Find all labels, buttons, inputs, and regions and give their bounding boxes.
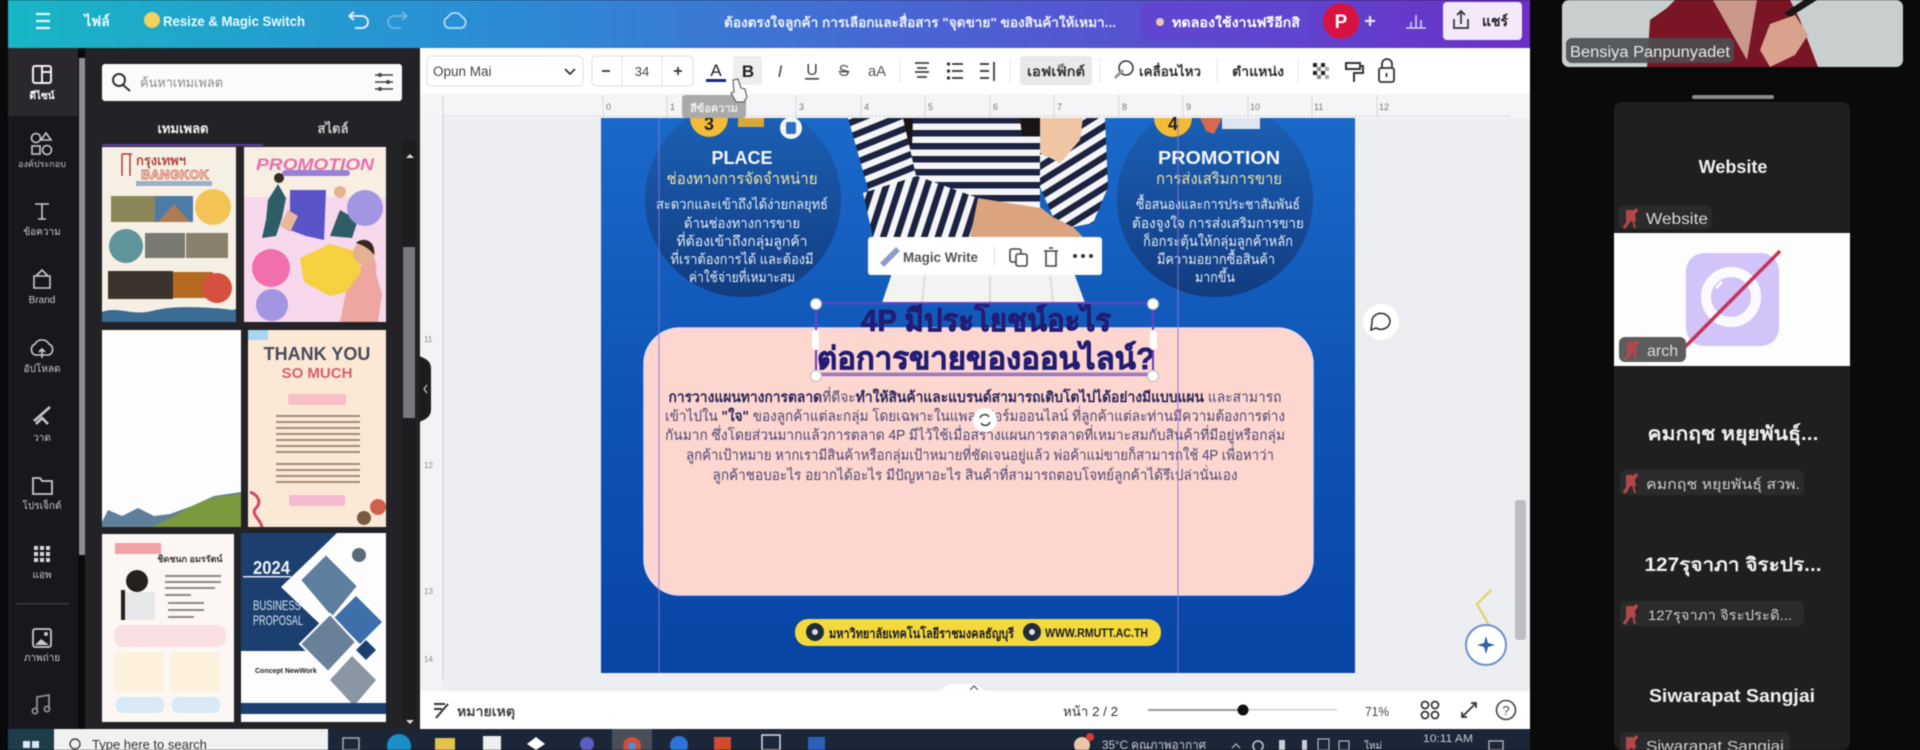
participant: Website: Website <box>1699 157 1767 177</box>
nav: design <box>29 66 55 102</box>
underline button: U <box>806 62 818 79</box>
nav: photos: ภาพถ่าย <box>24 653 60 664</box>
footer pill <box>795 619 1161 646</box>
left nav sidebar <box>8 48 85 730</box>
taskbar app icons <box>343 729 825 750</box>
panel collapse handle <box>419 356 431 422</box>
nav: design: ดีไซน์ <box>29 89 55 102</box>
participant: 127รุจาภา: 127รุจาภา จิระปร... <box>1644 555 1822 577</box>
place body: สะดวกและเข้าถึงได้ง่ายกลยุทธ์ <box>656 196 828 213</box>
icon: number 3 badge: 3 <box>704 114 714 134</box>
icon: fullscreen <box>1462 703 1476 717</box>
icon: windows start <box>23 741 39 748</box>
search box: ค้นหาเทมเพลต <box>140 75 223 90</box>
nav: text <box>23 204 61 238</box>
body paragraph: กันมาก ซึ่งโดยส่วนมากแล้วการตลาด 4P มีไว้ใช้เมื่อสร้างแผนการตลาดที่เหมาะสมกับสินค้าที่มีอยู่หรือกลุ่ม <box>665 425 1285 444</box>
place heading: PLACE <box>711 148 773 168</box>
template panel <box>85 48 420 730</box>
pink content panel <box>644 328 1313 595</box>
share button: แชร์ <box>1482 13 1509 29</box>
participant: คมกฤช: คมกฤช หยุยพันธุ์ สวพ. <box>1646 476 1800 493</box>
horizontal ruler: 3 <box>799 102 804 112</box>
nav: apps <box>32 546 52 581</box>
template: Thank you <box>248 330 386 527</box>
presenter name tag <box>1566 38 1734 63</box>
footer pill: มหาวิทยาลัยเทคโนโลยีราชมงคลธัญบุรี <box>829 625 1014 642</box>
vertical ruler: 13 <box>424 587 433 596</box>
icon: tag card <box>1222 118 1260 129</box>
search field <box>54 729 328 750</box>
icon: megaphone <box>1200 118 1222 134</box>
tabs: สไตล์ <box>318 120 348 136</box>
font selector: Opun Mai <box>433 64 492 79</box>
body paragraph <box>665 387 1285 484</box>
participant: arch: arch <box>1647 343 1678 360</box>
icon: notifications <box>1489 741 1503 750</box>
try pro button <box>1141 3 1309 40</box>
promotion body <box>1132 194 1304 285</box>
tooltip: text colour: สีข้อความ <box>690 102 738 115</box>
vertical ruler <box>420 96 443 691</box>
template: blank with hills <box>102 330 241 527</box>
text colour button <box>706 61 726 82</box>
template: Thank you: SO MUCH <box>282 365 352 382</box>
model photo: woman in striped shirt <box>848 118 1108 303</box>
editing toolbar <box>420 48 1530 118</box>
bold button <box>733 56 762 85</box>
windows taskbar <box>8 729 1530 750</box>
icon: number 3 badge <box>690 114 728 137</box>
design page <box>601 114 1355 673</box>
horizontal ruler: 7 <box>1057 102 1062 112</box>
body paragraph: การวางแผนทางการตลาดที่ดีจะทำให้สินค้าและแบรนด์สามารถเติบโตไปได้อย่างมีแบบแผน และสามารถ <box>668 387 1282 406</box>
page counter: หน้า 2 / 2 <box>1063 704 1118 719</box>
promotion body: มากขึ้น <box>1195 267 1235 285</box>
nav: photos <box>24 629 60 664</box>
participant: Siwarapat: Siwarapat Sangjai <box>1649 686 1815 706</box>
vertical ruler: 11 <box>424 335 433 344</box>
nav: music <box>32 695 50 714</box>
effects button <box>1020 56 1092 85</box>
icon: analytics <box>1406 15 1426 28</box>
horizontal ruler: 5 <box>928 102 933 112</box>
promotion body: ก็อกระตุ้นให้กลุ่มลูกค้าหลัก <box>1143 232 1293 250</box>
body paragraph: เข้าไปใน "ใจ" ของลูกค้าแต่ละกลุ่ม โดยเฉพาะในแพลตฟอร์มออนไลน์ ที่ลูกค้าแต่ละท่านมีความต้องการต่าง <box>665 406 1285 425</box>
weather widget <box>1074 733 1206 750</box>
template: business proposal: 2024 <box>253 558 290 578</box>
participant: Website <box>1618 157 1767 229</box>
font size stepper <box>592 56 693 86</box>
search box <box>102 64 402 101</box>
horizontal ruler: 0 <box>606 102 611 112</box>
panel: promotion <box>1117 114 1313 297</box>
icon: transparency <box>1313 63 1329 79</box>
bottom status bar <box>420 684 1530 729</box>
clock: 10:11 AM <box>1423 733 1473 745</box>
floating toolbar: Magic Write <box>868 237 1102 275</box>
canvas workspace <box>419 94 1530 691</box>
horizontal ruler: 9 <box>1186 102 1191 112</box>
floating toolbar: Magic Write: Magic Write <box>903 249 978 265</box>
promotion body: มีความอยากซื้อสินค้า <box>1157 249 1275 267</box>
promotion subheading: การส่งเสริมการขาย <box>1156 171 1282 188</box>
notes <box>434 704 515 720</box>
align button <box>915 63 929 77</box>
heading: 4P benefits <box>817 302 1155 376</box>
participant: คมกฤช <box>1620 423 1818 495</box>
nav: apps: แอพ <box>32 570 52 581</box>
panel: place <box>645 114 841 297</box>
nav: uploads <box>24 340 60 375</box>
icon: plus <box>1365 16 1375 26</box>
panel drag handle <box>1692 95 1774 99</box>
horizontal ruler: 12 <box>1379 102 1389 112</box>
template: Bangkok <box>102 147 236 322</box>
font selector <box>427 56 583 86</box>
canvas scrollbar <box>1515 500 1526 640</box>
icon: number 4 badge: 4 <box>1168 114 1178 134</box>
horizontal ruler: 8 <box>1122 102 1127 112</box>
place body: ด้านช่องทางการขาย <box>684 215 800 231</box>
template: Bangkok: BANGKOK <box>141 167 210 182</box>
zoom percent: 71% <box>1365 704 1389 719</box>
avatar P: P <box>1335 12 1348 33</box>
promotion body: ต้องจูงใจ การส่งเสริมการขาย <box>1132 215 1304 232</box>
icon: paint roller <box>1346 63 1363 82</box>
icon: hamburger menu <box>36 14 50 28</box>
footer pill: WWW.RMUTT.AC.TH <box>1045 626 1148 640</box>
participant: Website: Website <box>1646 211 1708 228</box>
horizontal ruler: 4 <box>864 102 869 112</box>
icon: cloud saved <box>444 13 466 28</box>
place body <box>656 196 828 285</box>
icon: redo <box>388 12 407 28</box>
place body: ค่าใช้จ่ายที่เหมาะสม <box>689 268 795 285</box>
horizontal ruler <box>420 94 1530 118</box>
document title: ต้องตรงใจลูกค้า การเลือกและสื่อสาร "จุดขาย" ของสินค้าให้เหมา... <box>724 13 1116 31</box>
nav: brand: Brand <box>29 295 55 306</box>
body paragraph: ลูกค้าเป้าหมาย หากเรามีสินค้าหรือกลุ่มเป้าหมายที่ชัดเจนอยู่แล้ว พ่อค้าแม่ขายก็สามารถใช้ 4P เพื่อหาว่า <box>686 445 1274 464</box>
presenter video tile <box>1562 0 1903 67</box>
comment button <box>1363 304 1399 340</box>
participant: arch <box>1614 233 1850 366</box>
icon: star badge <box>144 12 160 28</box>
promotion heading: PROMOTION <box>1158 148 1280 168</box>
heading: 4P benefits: ต่อการขายของออนไลน์? <box>817 340 1155 376</box>
presenter name tag: Bensiya Panpunyadet <box>1570 44 1731 61</box>
bold button: B <box>742 62 754 81</box>
template: business proposal: BUSINESS <box>253 597 301 613</box>
icon: map folder <box>738 118 764 127</box>
template: Promotion <box>244 147 386 322</box>
file menu: ไฟล์ <box>82 12 110 29</box>
text colour button: A <box>710 61 722 80</box>
italic button: I <box>778 62 783 81</box>
template: business proposal: Concept NewWork <box>255 668 317 675</box>
horizontal ruler: 1 <box>670 102 675 112</box>
nav: elements <box>18 133 66 169</box>
place body: ที่ต้องเข้าถึงกลุ่มลูกค้า <box>676 232 808 250</box>
icon: undo <box>349 12 368 28</box>
case button: aA <box>868 63 886 80</box>
tabs: เทมเพลต <box>157 121 209 136</box>
template: business proposal: PROPOSAL <box>253 612 303 628</box>
nav: draw: วาด <box>33 433 51 444</box>
participant: 127รุจาภา: 127รุจาภา จิระประดิ... <box>1648 607 1792 624</box>
magic assistant button <box>1466 625 1506 665</box>
nav: brand <box>29 270 55 306</box>
icon: grid view <box>1422 702 1438 718</box>
icon: number 4 badge <box>1154 114 1192 137</box>
notes: หมายเหตุ <box>457 704 515 720</box>
tabs <box>102 120 348 146</box>
layout guides <box>659 118 1178 673</box>
nav: draw <box>33 407 51 444</box>
icon: lock <box>1379 59 1394 82</box>
template: Promotion: PROMOTION <box>256 155 375 174</box>
template: business proposal <box>241 533 386 722</box>
nav: projects: โปรเจ็กต์ <box>23 498 61 512</box>
share button <box>1443 2 1522 40</box>
system tray <box>1232 739 1382 750</box>
list button <box>947 64 963 78</box>
zoom slider <box>1148 704 1337 716</box>
nav: uploads: อัปโหลด <box>24 362 60 375</box>
strikethrough button: S <box>839 63 849 80</box>
participant: 127รุจาภา <box>1620 555 1822 626</box>
font size stepper: 34 <box>635 64 649 79</box>
top header bar <box>8 0 1530 48</box>
icon: help: ? <box>1502 703 1510 718</box>
horizontal ruler: 6 <box>993 102 998 112</box>
resize label: Resize & Magic Switch <box>163 13 305 29</box>
try pro button: ทดลองใช้งานฟรีอีกสิ <box>1172 14 1300 30</box>
icon: hand cursor <box>731 79 747 102</box>
template: resume: ชิดชนก อมรรัตน์ <box>157 553 223 564</box>
participant: Siwarapat <box>1620 686 1815 750</box>
annotation squiggle <box>1477 590 1491 630</box>
nav: projects <box>23 478 61 512</box>
participants panel <box>1614 102 1850 750</box>
vertical ruler: 12 <box>424 461 433 470</box>
tooltip: text colour <box>682 95 746 118</box>
nav: elements: องค์ประกอบ <box>18 158 66 169</box>
template: Bangkok: กรุงเทพฯ <box>136 153 186 169</box>
template: resume <box>102 534 234 722</box>
place body: ที่เราต้องการได้ และต้องมี <box>670 250 814 267</box>
avatar P <box>1323 3 1359 39</box>
icon: rotate handle <box>973 408 997 432</box>
spacing button <box>980 62 994 81</box>
place subheading: ช่องทางการจัดจำหน่าย <box>666 171 818 188</box>
horizontal ruler: 10 <box>1250 102 1260 112</box>
horizontal ruler: 2 <box>735 102 740 112</box>
horizontal ruler: 11 <box>1314 102 1323 112</box>
animate button <box>1115 61 1201 79</box>
effects button: เอฟเฟ็กต์ <box>1027 62 1085 79</box>
heading: 4P benefits: 4P มีประโยชน์อะไร <box>861 302 1111 338</box>
icon: pin badge <box>780 117 802 139</box>
body paragraph: ลูกค้าชอบอะไร อยากได้อะไร มีปัญหาอะไร สินค้าที่สามารถตอบโจทย์ลูกค้าได้รึเปล่านั่นเอง <box>712 465 1238 484</box>
position button: ตำแหน่ง <box>1232 64 1284 79</box>
promotion body: ซื้อสนองและการประชาสัมพันธ์ <box>1136 194 1300 212</box>
vertical ruler: 14 <box>424 655 433 664</box>
text selection box <box>810 298 1158 382</box>
animate button: เคลื่อนไหว <box>1139 62 1201 79</box>
template: Thank you: THANK YOU <box>264 344 370 364</box>
icon: help <box>1496 700 1516 720</box>
nav: text: ข้อความ <box>23 226 61 238</box>
participant: คมกฤช: คมกฤช หยุยพันธุ์... <box>1648 423 1818 446</box>
scrollbar <box>402 140 416 724</box>
